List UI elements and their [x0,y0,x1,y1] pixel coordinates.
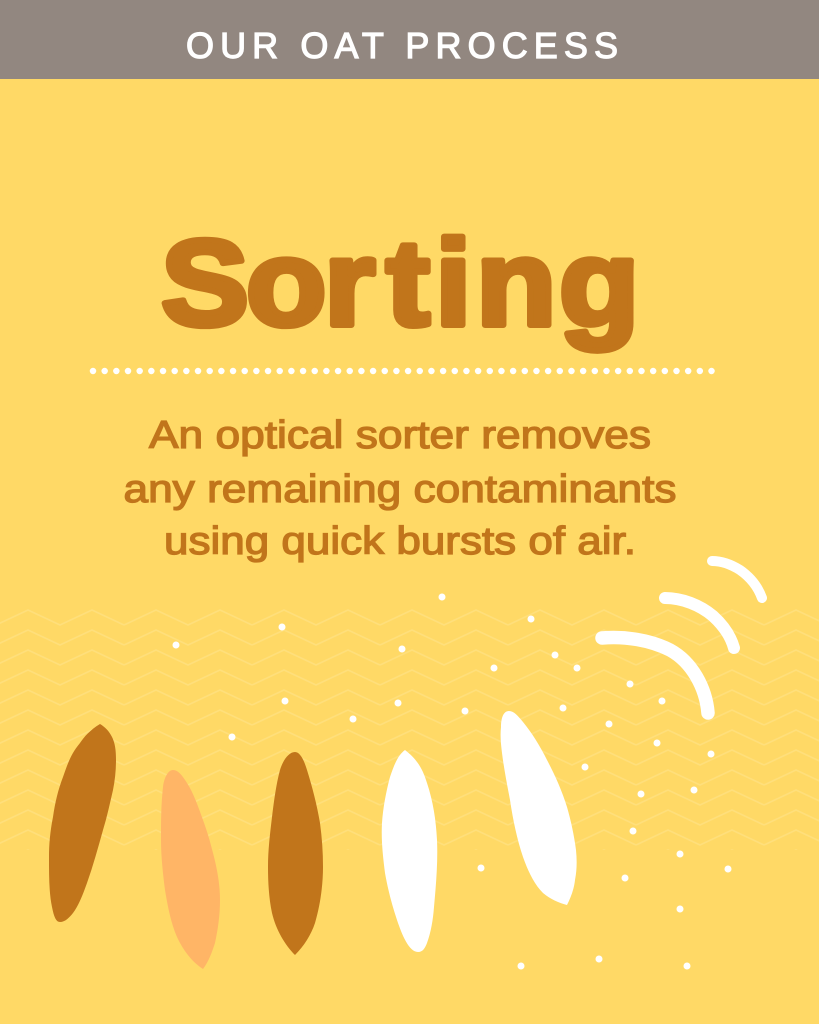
grain: brown upright [268,752,323,955]
air particles [172,594,732,970]
description: An optical sorter removes [149,414,651,457]
description [124,414,676,563]
dotted divider [93,368,712,374]
grain: white upright [382,750,437,952]
header title: OUR OAT PROCESS [186,25,618,66]
oat grains [49,711,577,969]
description: using quick bursts of air. [164,520,636,563]
description: any remaining contaminants [124,468,676,511]
grain: contaminated orange [161,770,220,969]
air burst arcs [602,561,762,713]
header band [0,0,819,79]
title: Sorting [161,215,639,351]
grain: brown tilted [49,724,116,922]
grain: white tilted [501,711,577,905]
